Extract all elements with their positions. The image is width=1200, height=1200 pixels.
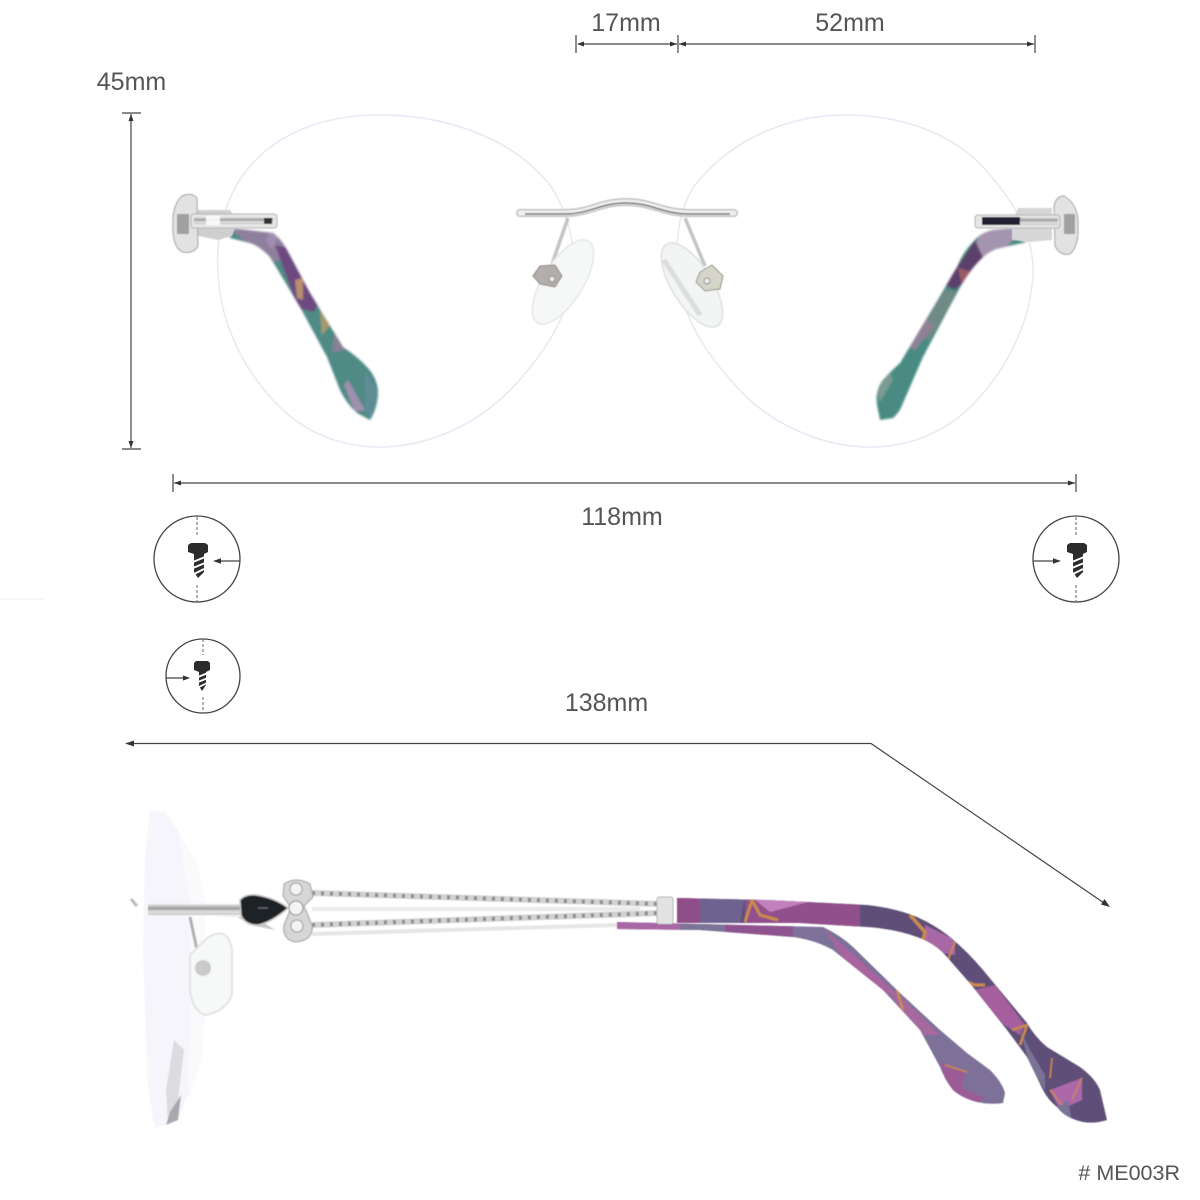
twisted temple ropes (312, 893, 660, 934)
dimension: bridge width 17mm: 17mm (591, 9, 661, 37)
dimension: temple length 138mm (125, 689, 1110, 907)
side nose pad (190, 917, 232, 1015)
far temple arm (610, 915, 1010, 1110)
front view of glasses (173, 115, 1078, 447)
right hinge with crystal flower (975, 196, 1078, 254)
product code: # ME003R (1078, 1161, 1180, 1185)
crystal ornament (283, 880, 313, 942)
left lens outline (218, 115, 574, 447)
dimension: temple length 138mm: 138mm (565, 689, 648, 717)
lens side profile (143, 811, 206, 1128)
dimension: frame width 118mm: 118mm (581, 503, 663, 531)
bridge (520, 202, 734, 214)
dimension: lens height 45mm: 45mm (97, 68, 166, 96)
dimension: bridge width 17mm (576, 9, 678, 53)
left hinge with crystal flower (173, 194, 277, 252)
screw icon: nose pad (166, 639, 240, 713)
dimension: lens height 45mm (97, 68, 166, 449)
dimension: lens width 52mm: 52mm (815, 9, 885, 37)
right lens outline (677, 115, 1033, 447)
near temple arm (670, 890, 1115, 1130)
side view of glasses (131, 811, 1115, 1130)
screw icon: left hinge (154, 516, 240, 602)
nose pads and arms (521, 218, 734, 336)
right temple arm (870, 225, 1030, 425)
side hinge bar and enamel teardrop (131, 895, 288, 930)
dimension: lens width 52mm (679, 9, 1035, 53)
left temple arm (225, 225, 385, 425)
screw icon: right hinge (1033, 516, 1119, 602)
dimension: frame width 118mm (173, 474, 1076, 531)
temple metal end block (657, 897, 673, 924)
